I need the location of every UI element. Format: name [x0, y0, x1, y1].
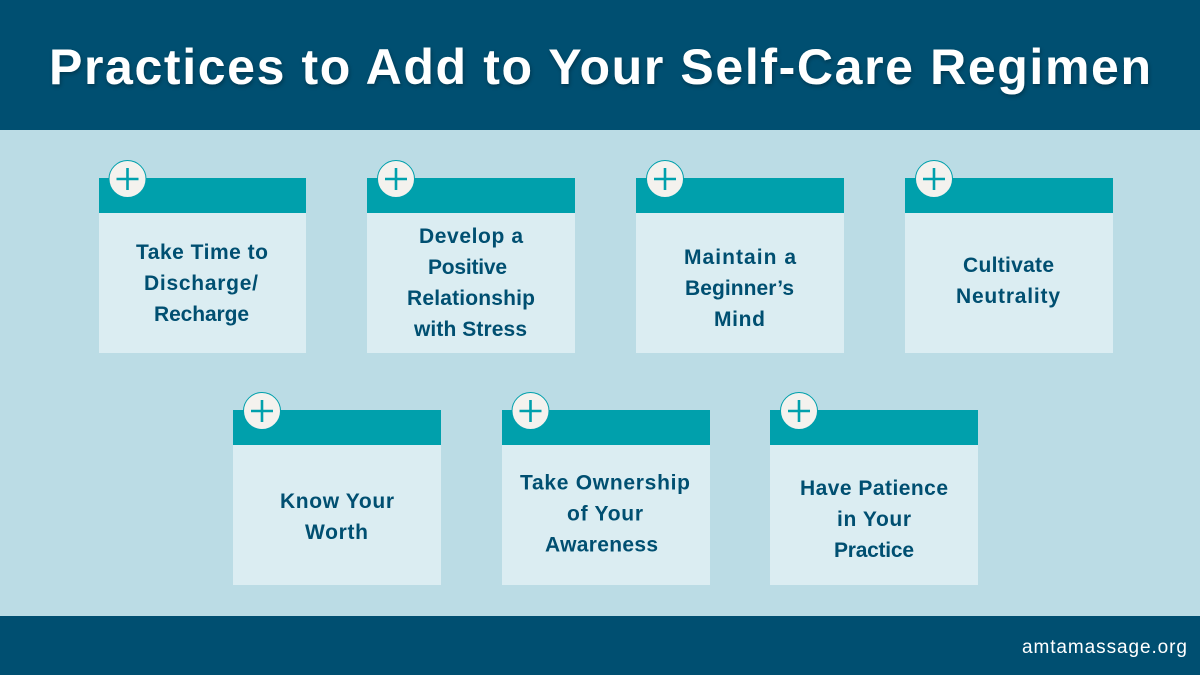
card text	[684, 246, 796, 331]
card: Have Patience in Your Practice	[770, 392, 978, 585]
card: Take Time to Discharge/Recharge	[99, 160, 306, 353]
card text: Awareness	[545, 534, 658, 556]
card text	[136, 241, 268, 326]
website credit: amtamassage.org	[1022, 637, 1187, 658]
card text: Beginner’s	[685, 277, 794, 300]
card text: Take Ownership	[520, 472, 690, 494]
card text	[280, 490, 394, 544]
card text: Cultivate	[963, 254, 1054, 277]
icon: plus	[780, 392, 818, 430]
card text	[520, 472, 690, 556]
icon: plus	[109, 160, 146, 198]
card text: Practice	[834, 539, 914, 562]
card: Develop a Positive Relationship with Stress	[367, 160, 575, 353]
header band	[0, 0, 1200, 130]
footer band	[0, 616, 1200, 675]
card text	[956, 254, 1060, 308]
card text: Worth	[305, 521, 368, 544]
card text	[407, 225, 535, 341]
card: Cultivate Neutrality	[905, 160, 1113, 353]
card text: Relationship	[407, 287, 535, 310]
card text: Positive	[428, 256, 507, 279]
card text: Neutrality	[956, 285, 1060, 308]
card: Take Ownership of Your Awareness	[502, 392, 710, 585]
card text: Recharge	[154, 303, 249, 326]
card text: Have Patience	[800, 477, 948, 500]
card text: Maintain a	[684, 246, 796, 269]
card text: Discharge/	[144, 272, 258, 295]
card text: Know Your	[280, 490, 394, 513]
title: Practices to Add to Your Self-Care Regimen	[49, 39, 1151, 95]
icon: plus	[378, 160, 414, 198]
card text: Mind	[714, 308, 765, 331]
card text	[800, 477, 948, 562]
icon: plus	[244, 392, 280, 430]
card: Know Your Worth	[233, 392, 441, 585]
card: Maintain a Beginner's Mind	[636, 160, 844, 353]
card text: in Your	[837, 508, 911, 531]
icon: plus	[916, 160, 952, 198]
card text: Develop a	[419, 225, 523, 248]
card text: Take Time to	[136, 241, 268, 264]
icon: plus	[646, 160, 684, 198]
icon: plus	[512, 392, 549, 430]
card text: with Stress	[413, 318, 527, 341]
card text: of Your	[567, 502, 643, 526]
